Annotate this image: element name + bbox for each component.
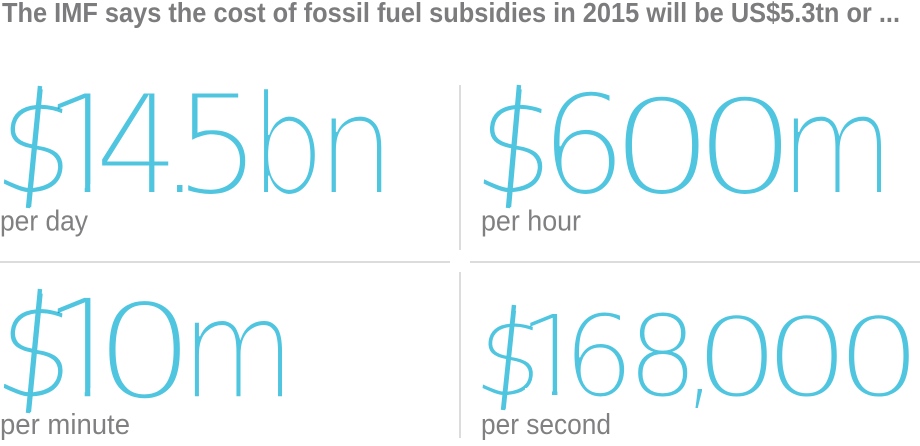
- figure: $168,000: 0: [694, 294, 780, 421]
- panel: per day: [0, 66, 395, 237]
- panel: per hour: [469, 66, 894, 238]
- figure: $168,000: 1: [517, 292, 589, 422]
- panel: per minute: [0, 270, 295, 441]
- figure: $14.5bn: n: [317, 66, 395, 225]
- figure: $14.5bn: 4: [95, 66, 180, 225]
- figure: $168,000: 0: [836, 294, 920, 421]
- figure: $168,000: 6: [563, 292, 634, 422]
- label: per second: per second: [481, 409, 611, 441]
- figure: $14.5bn: [0, 66, 395, 226]
- figure: $168,000: 8: [627, 292, 698, 422]
- figure: $14.5bn: 1: [42, 67, 129, 226]
- figure: $14.5bn: b: [250, 66, 325, 226]
- figure: $10m: [0, 270, 295, 430]
- figure: $600m: [469, 66, 894, 226]
- figure: $168,000: 0: [764, 294, 850, 421]
- figure: $600m: 6: [540, 67, 627, 226]
- figure: $600m: $: [469, 66, 562, 225]
- figure: $10m: 0: [94, 277, 195, 428]
- figure: $10m: 1: [42, 271, 129, 430]
- figure: $600m: 0: [610, 72, 715, 223]
- label: per minute: per minute: [0, 409, 130, 441]
- panel: per second: [470, 292, 920, 441]
- figure: $168,000: [470, 292, 920, 424]
- figure: $10m: m: [181, 271, 295, 430]
- figure: $14.5bn: 5: [174, 67, 261, 226]
- figure: $168,000: $: [470, 292, 551, 422]
- figure: $14.5bn: .: [158, 67, 202, 226]
- figure: $600m: m: [780, 67, 894, 226]
- label: per hour: per hour: [481, 206, 581, 238]
- figure: $168,000: ,: [682, 292, 718, 422]
- label: per day: per day: [0, 206, 88, 238]
- figure: $600m: 0: [694, 72, 797, 224]
